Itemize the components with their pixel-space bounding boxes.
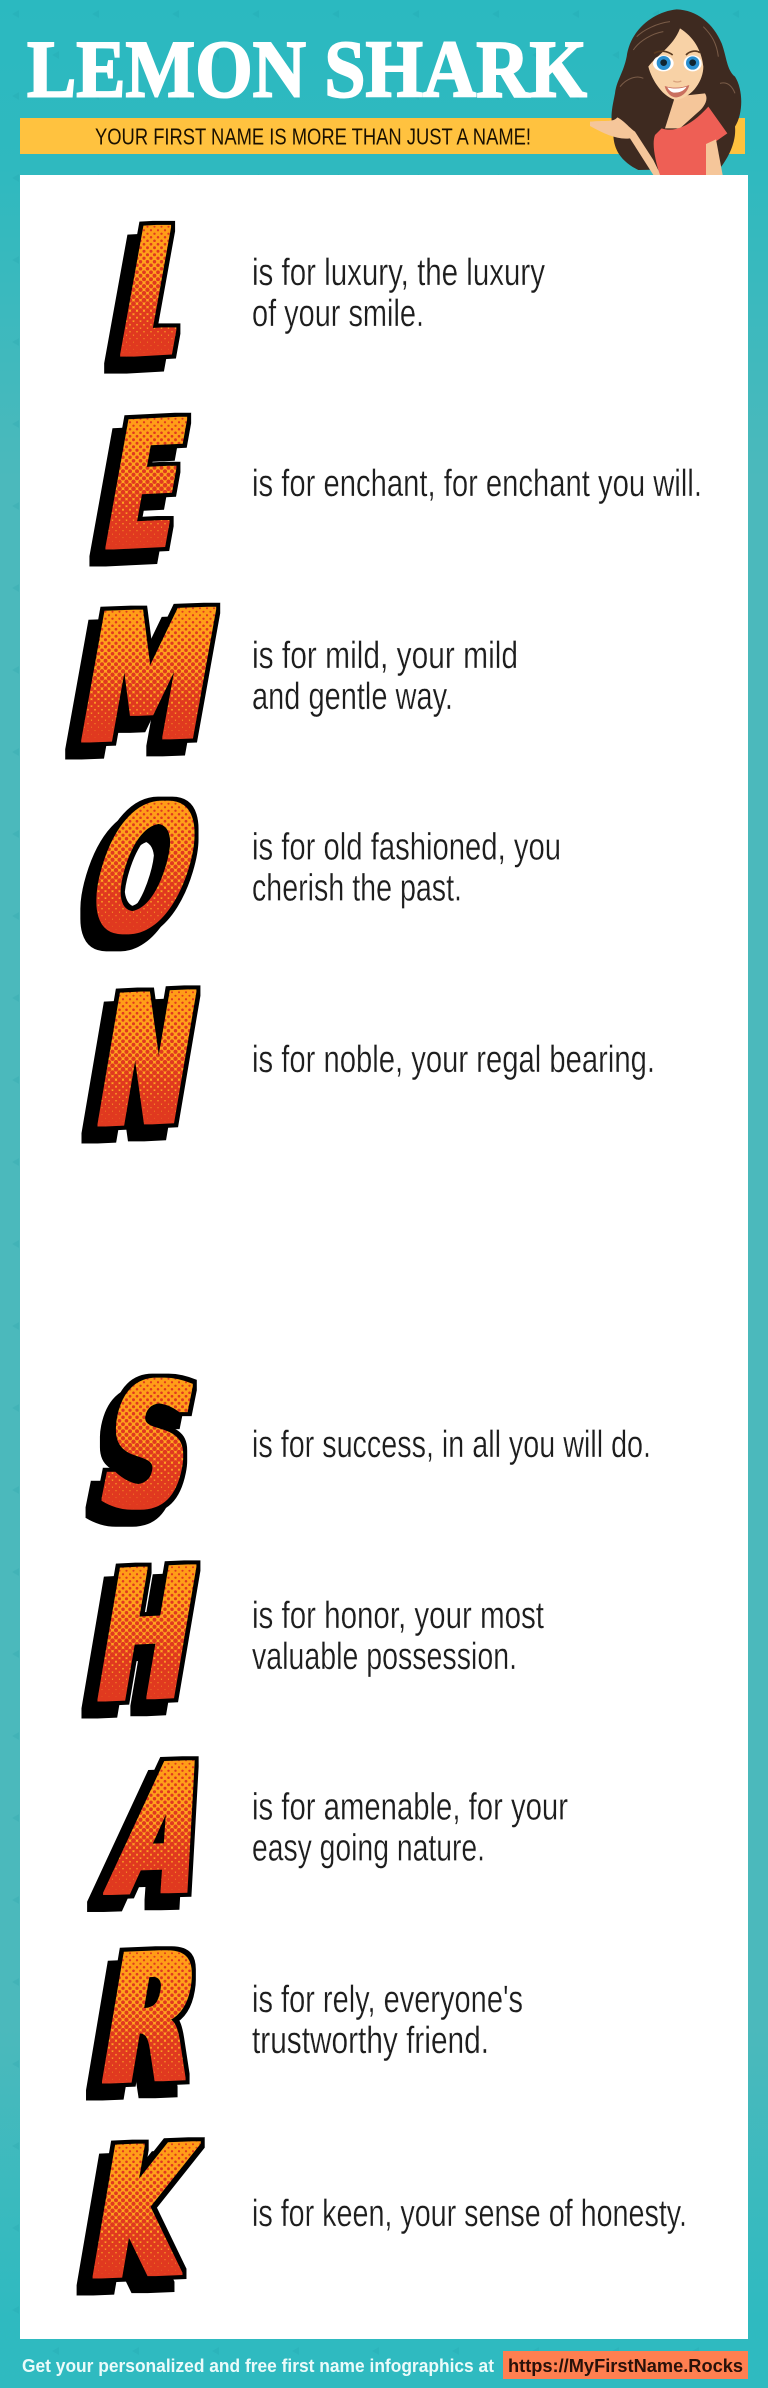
- comic letter L: L: [113, 191, 196, 399]
- description S: is for success, in all you will do.: [252, 1424, 651, 1466]
- comic letter N: [81, 985, 200, 1144]
- comic letter M: M: [66, 572, 230, 784]
- description M: and gentle way.: [252, 676, 453, 718]
- description H: is for honor, your most: [252, 1595, 544, 1637]
- letter O row: [80, 796, 560, 952]
- comic letter A: [87, 1756, 199, 1912]
- letter K row: [76, 2137, 684, 2296]
- description R: is for rely, everyone's: [252, 1979, 523, 2021]
- description L: is for luxury, the luxury: [252, 252, 545, 294]
- description O: cherish the past.: [252, 868, 462, 910]
- description A: [252, 1786, 568, 1870]
- letter N row: [81, 985, 652, 1144]
- comic letter H: H: [84, 1530, 208, 1745]
- letter L row: [104, 220, 545, 374]
- comic letter A: A: [95, 1725, 227, 1937]
- description A: easy going nature.: [252, 1828, 485, 1870]
- letter M row: [65, 602, 516, 760]
- footer call to action: Get your personalized and free first name infographics at: [22, 2356, 494, 2376]
- description M: [252, 635, 518, 718]
- description H: [252, 1595, 544, 1678]
- comic letter E: E: [93, 383, 198, 592]
- comic letter R: [86, 1946, 196, 2100]
- letter A row: [87, 1756, 568, 1912]
- comic letter S: [86, 1374, 197, 1527]
- letter E row: [89, 412, 700, 566]
- description L: of your smile.: [252, 293, 424, 335]
- comic letter K: K: [79, 2107, 208, 2322]
- comic letter O: O: [69, 763, 222, 971]
- description R: [252, 1979, 523, 2062]
- footer link badge: [503, 2351, 748, 2379]
- description H: valuable possession.: [252, 1636, 517, 1678]
- letter H row: [81, 1560, 544, 1718]
- letter R row: [86, 1946, 522, 2100]
- footer link badge: https://MyFirstName.Rocks: [508, 2356, 743, 2376]
- comic letter O: [80, 796, 199, 952]
- comic letter M: [65, 602, 220, 760]
- description O: is for old fashioned, you: [252, 826, 561, 868]
- description L: [252, 252, 545, 335]
- description O: [252, 826, 561, 910]
- tagline banner: [20, 118, 745, 154]
- comic letter E: [89, 412, 192, 566]
- comic letter N: N: [84, 955, 208, 1170]
- title: LEMON SHARK: [27, 24, 587, 114]
- comic letter L: [104, 220, 180, 374]
- description A: is for amenable, for your: [252, 1786, 568, 1828]
- description R: trustworthy friend.: [252, 2020, 489, 2062]
- icon: cartoon woman presenter: [590, 9, 741, 175]
- tagline text: YOUR FIRST NAME IS MORE THAN JUST A NAME!: [95, 124, 531, 150]
- comic letter H: [81, 1560, 200, 1718]
- comic letter S: S: [87, 1348, 210, 1548]
- letter S row: [86, 1374, 648, 1527]
- description M: is for mild, your mild: [252, 635, 518, 677]
- footer: [22, 2351, 748, 2379]
- comic letter R: R: [88, 1913, 212, 2125]
- description N: is for noble, your regal bearing.: [252, 1039, 655, 1081]
